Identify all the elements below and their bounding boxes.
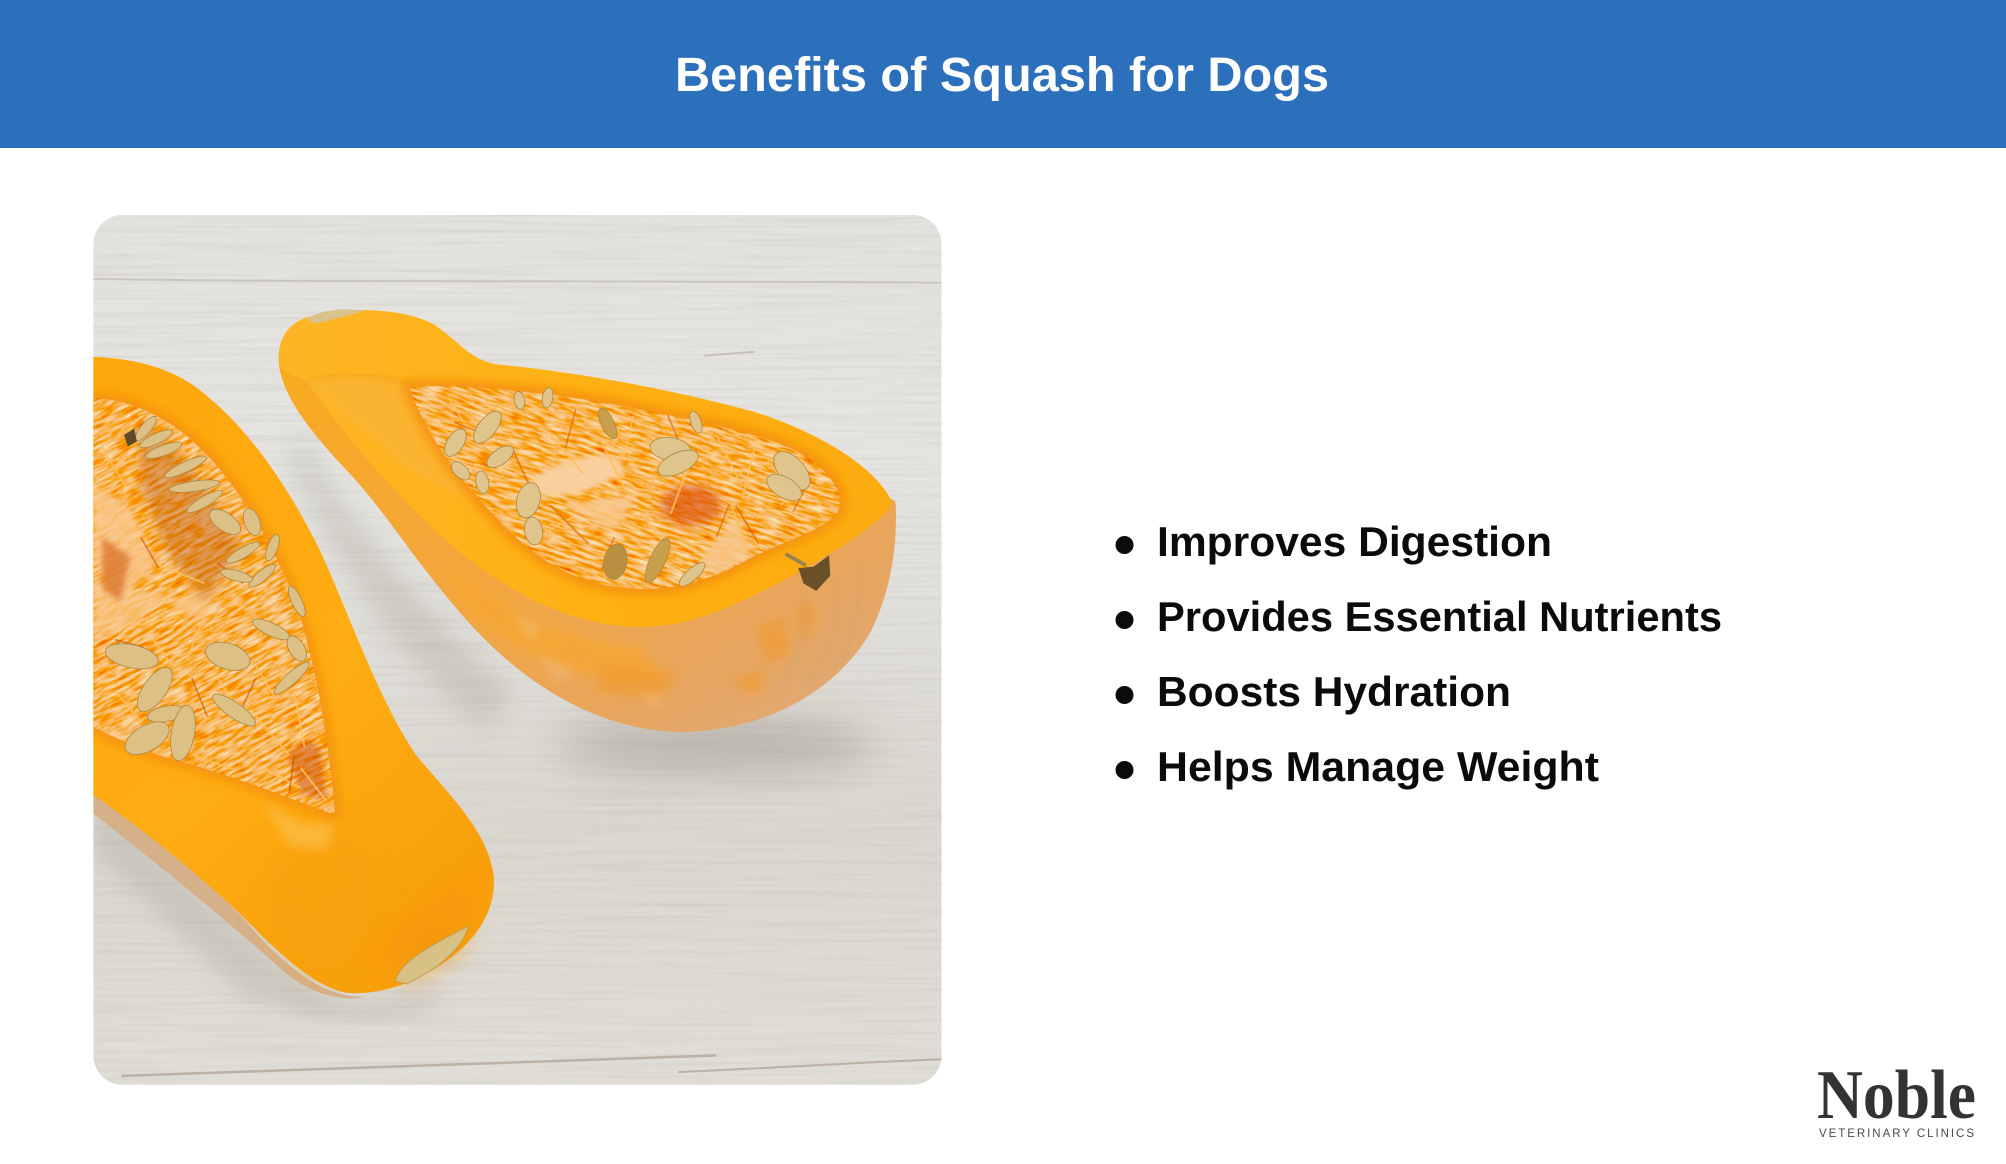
blossom nub [798,555,830,591]
stem end [395,926,468,984]
fine strands [435,397,806,555]
logo: Noble Veterinary Clinics: Noble [1817,1057,1976,1134]
logo: Noble Veterinary Clinics: VETERINARY CLINICS [1819,1128,1974,1140]
left squash [93,356,494,998]
title: Benefits of Squash for Dogs [675,49,1329,102]
flesh face [77,357,494,993]
photo: halved butternut squash on white wood [93,215,942,1085]
cavity [410,386,840,589]
seeds [103,414,313,763]
fine strands [102,448,326,801]
shadows [557,716,876,773]
list item: Improves Digestion: Improves Digestion [1157,518,1552,565]
pale inner fold [312,378,470,497]
stem end [307,309,365,324]
thin skin edge [93,788,364,998]
skin [279,365,896,732]
bullet list: benefits [1116,518,1722,790]
cavity rim shadow [409,386,840,589]
rim face [279,310,892,627]
list item: Boosts Hydration: Boosts Hydration [1157,668,1511,715]
list item: Provides Essential Nutrients: Provides Essential Nutrients [1157,593,1722,640]
list item: Helps Manage Weight: Helps Manage Weight [1157,743,1599,790]
right squash [278,309,896,732]
cavity rim shadow [77,398,335,815]
header banner [0,0,2006,148]
cavity [93,398,335,815]
seeds [440,387,817,590]
plank seams [93,279,942,283]
